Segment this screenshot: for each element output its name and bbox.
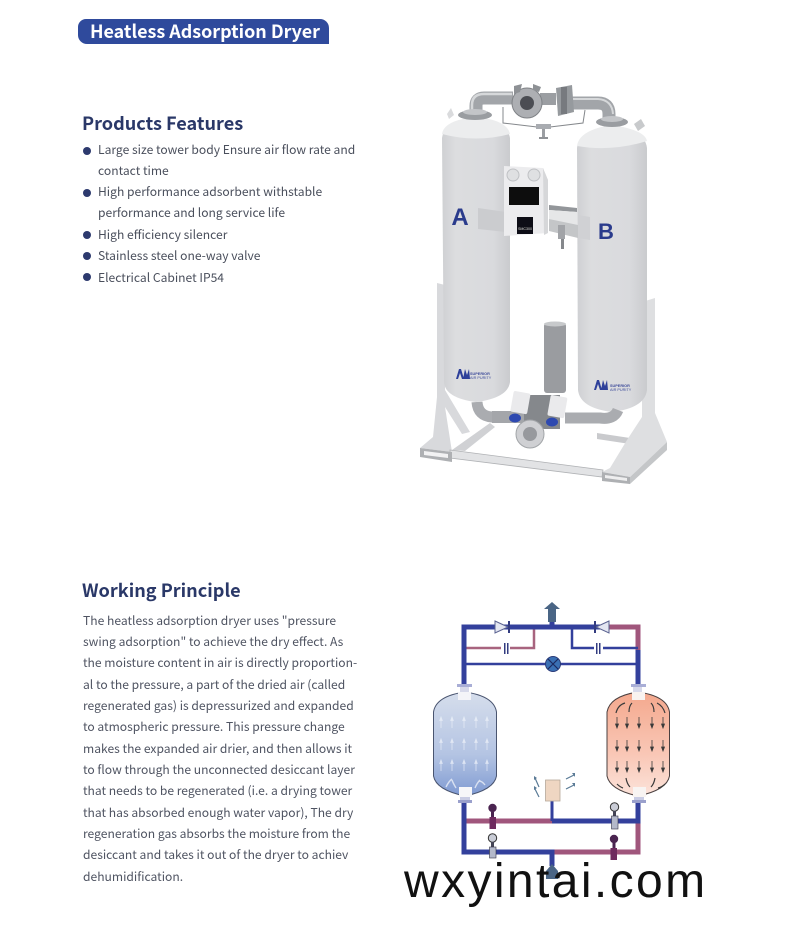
feature 1 text: contact time xyxy=(98,162,169,179)
label B: B xyxy=(598,219,614,244)
title badge: Heatless Adsorption Dryer xyxy=(90,18,320,44)
orifice left xyxy=(501,642,510,654)
frame and base xyxy=(420,283,667,484)
feature 4 text: Stainless steel one-way valve xyxy=(98,247,260,264)
text block: working principle description: regeneration gas absorbs the moisture from the xyxy=(83,825,350,842)
text block: working principle description: al to the pressure, a part of the dried air (called xyxy=(83,676,345,693)
label A: A xyxy=(451,204,469,231)
text block: working principle description: that has absorbed enough water vapor), The dry xyxy=(83,804,353,821)
feature 1 text xyxy=(98,140,355,179)
control cabinet xyxy=(504,166,548,236)
tower B xyxy=(577,116,647,412)
ball valve xyxy=(546,656,560,672)
bullet 4 xyxy=(83,252,91,260)
bottom valve assembly xyxy=(477,391,618,448)
bullet 1 xyxy=(83,146,91,154)
mounting bracket xyxy=(478,205,590,249)
filter cylinder xyxy=(544,322,566,393)
tower A logo xyxy=(456,369,492,380)
bullet 3 xyxy=(83,230,91,238)
text block: working principle description: swing adsorption" to achieve the dry effect. As xyxy=(83,633,343,650)
bullet 2 xyxy=(83,188,91,196)
tank left: adsorbing xyxy=(434,684,496,803)
product photo: heatless adsorption dryer xyxy=(420,84,667,484)
control valve gray upper-right xyxy=(610,803,619,829)
tower B logo: AIR PURITY xyxy=(610,388,632,392)
orifice right xyxy=(594,642,603,654)
text block: working principle description: to flow through the unconnected desiccant layer xyxy=(83,761,355,778)
tower B logo xyxy=(594,380,632,392)
check valve right xyxy=(594,621,609,633)
panel: features list xyxy=(83,140,355,286)
down arrows xyxy=(616,703,665,788)
watermark: wxyintai.com xyxy=(404,855,708,908)
tower A logo: AIR PURITY xyxy=(470,376,492,380)
feature 3 text: High efficiency silencer xyxy=(98,226,227,242)
feature 1 text: Large size tower body Ensure air flow rate and xyxy=(98,140,355,158)
muffler box with vapor arrows xyxy=(534,773,575,801)
pink regeneration lines xyxy=(464,627,638,852)
text block: working principle description: makes the expanded air drier, and then allows it xyxy=(83,740,352,757)
check valve left xyxy=(495,621,510,633)
up arrows xyxy=(440,717,488,788)
small controller display xyxy=(517,217,533,234)
text block: working principle description: dehumidification. xyxy=(83,868,183,885)
tower A xyxy=(442,108,510,402)
bullet 5 xyxy=(83,272,91,280)
text block: working principle description: The heatless adsorption dryer uses "pressure xyxy=(83,612,336,628)
control cabinet: SMC300 xyxy=(518,227,532,231)
tank right: regenerating xyxy=(607,684,670,803)
control valve purple lower-right xyxy=(610,835,618,860)
control valve purple upper-left xyxy=(488,804,497,829)
screen xyxy=(509,187,539,205)
text block: working principle description: regenerated gas) is depressurized and expanded xyxy=(83,697,354,714)
blue dry-air lines xyxy=(464,620,638,866)
feature 2 text: performance and long service life xyxy=(98,204,285,221)
top piping xyxy=(472,84,613,139)
text block: working principle description: the moisture content in air is directly proportion- xyxy=(83,654,357,671)
text block: working principle description xyxy=(83,612,357,885)
tower B logo: SUPERIOR xyxy=(610,384,630,388)
arrow: purge exhaust xyxy=(546,864,558,879)
process diagram: pressure swing adsorption xyxy=(434,602,670,879)
heading: products features: Products Features xyxy=(82,110,243,136)
feature 2 text xyxy=(98,183,322,221)
arrow: air outlet xyxy=(544,602,560,622)
control valve gray lower-left xyxy=(488,834,497,858)
feature 2 text: High performance adsorbent withstable xyxy=(98,183,322,200)
tower A logo: SUPERIOR xyxy=(470,372,490,376)
text block: working principle description: to atmospheric pressure. This pressure change xyxy=(83,718,345,735)
heading: working principle: Working Principle xyxy=(82,577,241,603)
feature 5 text: Electrical Cabinet IP54 xyxy=(98,268,224,286)
text block: working principle description: that needs to be regenerated (i.e. a drying tower xyxy=(83,782,352,799)
text block: working principle description: desiccant and takes it out of the dryer to achiev xyxy=(83,846,348,863)
